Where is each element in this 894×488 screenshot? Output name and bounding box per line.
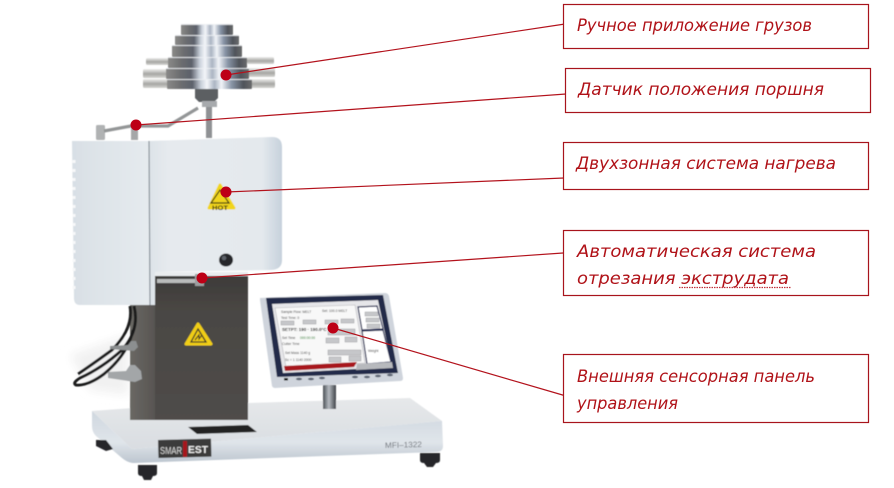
callout: piston sensor	[566, 68, 870, 112]
marker: weights	[220, 70, 232, 80]
touch panel: Weight	[368, 349, 379, 353]
piston sensor lever	[96, 106, 212, 140]
weights stack	[143, 24, 275, 107]
callout: extrudate cutter: отрезания экструдата	[577, 269, 789, 289]
callout: touch panel	[564, 354, 868, 422]
callout: touch panel: управления	[576, 394, 678, 414]
touch panel: Set Time	[282, 336, 295, 340]
touch panel: Set Mass 1140 g	[285, 351, 310, 355]
bezel buttons	[284, 374, 393, 380]
marker: cutter	[196, 272, 208, 284]
screen panels	[275, 305, 365, 367]
touch panel: Set: 100.0 MELT	[322, 309, 347, 313]
callout: piston sensor: Датчик положения поршня	[577, 80, 824, 100]
handles	[143, 57, 275, 88]
base plate	[92, 398, 443, 463]
warning sticker	[186, 324, 211, 344]
leader line: touch panel	[333, 328, 566, 396]
leader line: cutter	[202, 253, 563, 278]
feet	[96, 440, 440, 480]
heater housing	[72, 137, 282, 305]
callout: heating system	[564, 142, 868, 190]
callout: heating system: Двухзонная система нагрева	[575, 154, 836, 174]
knob	[219, 254, 233, 266]
stem	[195, 88, 218, 102]
leader line: heating system	[226, 178, 564, 192]
callout: extrudate cutter	[564, 230, 868, 296]
shadow	[70, 335, 128, 395]
discs	[166, 24, 252, 89]
touch panel: Test Time: 0	[281, 316, 299, 320]
logo plate: EST	[188, 445, 208, 456]
touch panel: Sample Flow: MELT	[281, 310, 311, 314]
touch panel	[260, 293, 403, 388]
callout: manual weights	[564, 4, 868, 48]
connectors	[108, 341, 142, 382]
disc rims	[166, 24, 252, 80]
touch panel: Sc = 1 1140 2000	[285, 358, 312, 362]
model label: MFI–1322	[385, 440, 423, 450]
hot sticker	[209, 185, 234, 212]
cutter rod	[157, 279, 196, 283]
base recess	[188, 425, 257, 434]
machine illustration	[70, 24, 443, 480]
touch panel: Cutter Time	[282, 342, 300, 346]
monitor stand	[323, 385, 336, 409]
callout: touch panel: Внешняя сенсорная панель	[577, 367, 815, 387]
callout: manual weights: Ручное приложение грузов	[577, 16, 812, 36]
dark block	[130, 272, 248, 420]
cables	[75, 306, 136, 385]
callout: extrudate cutter: Автоматическая система	[576, 242, 816, 262]
leader line: manual weights	[226, 24, 565, 75]
touch panel: 000:00:00	[300, 336, 315, 340]
leader line: piston sensor	[136, 94, 566, 125]
logo plate	[158, 439, 211, 458]
marker: piston sensor	[130, 120, 142, 130]
marker: touch panel	[328, 322, 338, 334]
ventilation holes	[72, 160, 76, 290]
marker: heating	[220, 186, 232, 198]
logo plate: SMAR	[160, 446, 182, 457]
touch panel: SETPT: 190 · 190.0°C	[282, 327, 327, 332]
hot sticker: HOT	[212, 205, 228, 212]
